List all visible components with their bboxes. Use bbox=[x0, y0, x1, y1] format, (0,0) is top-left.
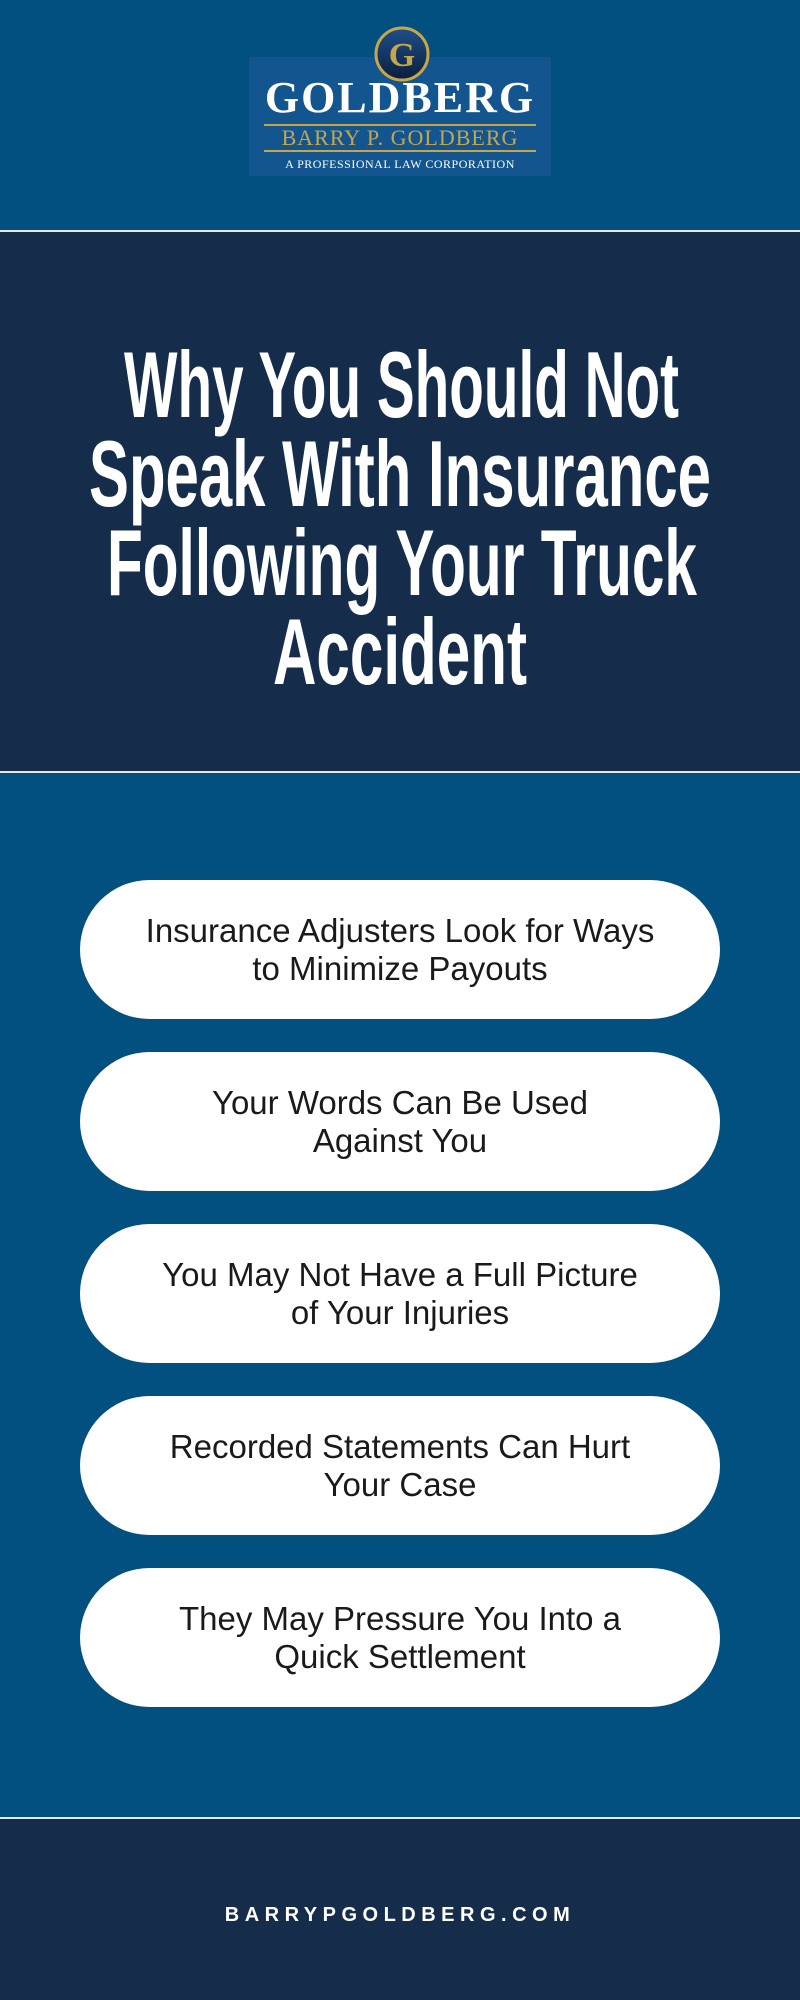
pill 1: to Minimize Payouts bbox=[252, 950, 548, 986]
pill 2 bbox=[80, 1052, 720, 1191]
pill 2: Your Words Can Be Used bbox=[212, 1084, 588, 1120]
logo text: GOLDBERG bbox=[265, 73, 535, 122]
logo box bbox=[249, 57, 551, 176]
logo text: BARRY P. GOLDBERG bbox=[282, 125, 518, 150]
pill 1: Insurance Adjusters Look for Ways bbox=[146, 912, 654, 948]
icon: G medallion: G bbox=[389, 37, 415, 74]
footer url: BARRYPGOLDBERG.COM bbox=[225, 1904, 575, 1926]
pill 2: Against You bbox=[313, 1122, 487, 1158]
pill 4 bbox=[80, 1396, 720, 1535]
pill 3: You May Not Have a Full Picture bbox=[162, 1256, 638, 1292]
logo text: A PROFESSIONAL LAW CORPORATION bbox=[285, 157, 515, 171]
pill 5: They May Pressure You Into a bbox=[179, 1600, 621, 1636]
header: logo bbox=[0, 0, 800, 230]
title: Accident bbox=[273, 599, 527, 704]
pill 3 bbox=[80, 1224, 720, 1363]
footer bbox=[0, 1817, 800, 2000]
pill 4: Recorded Statements Can Hurt bbox=[170, 1428, 630, 1464]
title section bbox=[0, 230, 800, 773]
pill 4: Your Case bbox=[324, 1466, 476, 1502]
title bbox=[89, 332, 711, 704]
pill 5: Quick Settlement bbox=[274, 1638, 526, 1674]
pill 1 bbox=[80, 880, 720, 1019]
pill 5 bbox=[80, 1568, 720, 1707]
logo text bbox=[264, 73, 536, 171]
pill 3: of Your Injuries bbox=[291, 1294, 509, 1330]
icon: G medallion bbox=[374, 26, 430, 82]
